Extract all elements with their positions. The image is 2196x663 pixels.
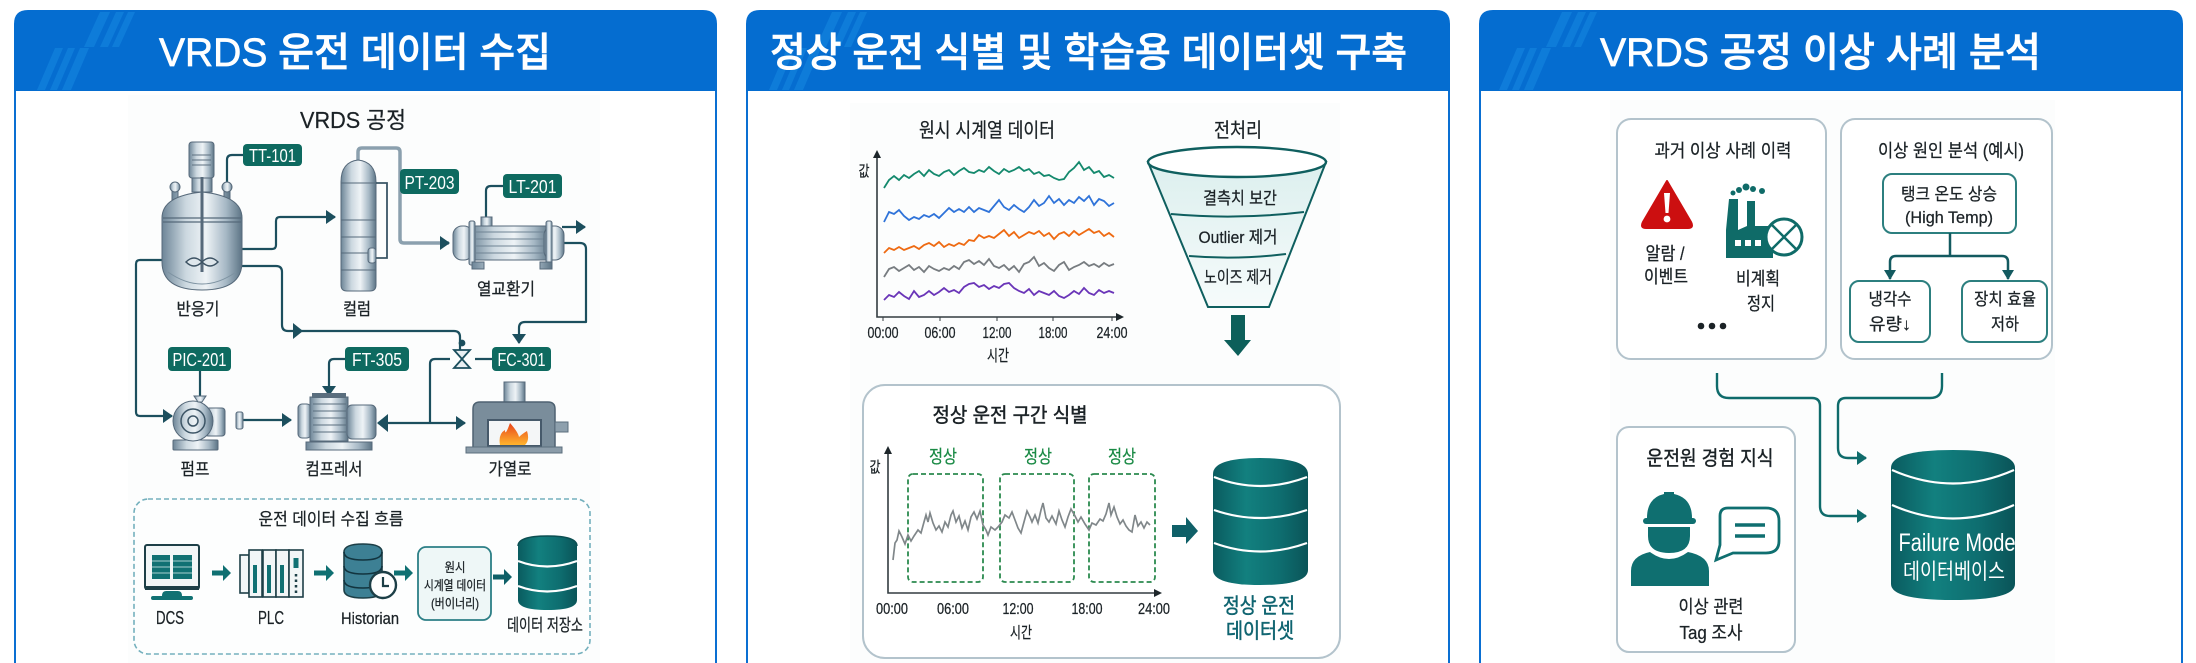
- DCS label: DCS: [156, 608, 184, 628]
- panel: past failure history: [1617, 119, 1826, 359]
- series: blue: [884, 196, 1114, 222]
- reactor: [162, 142, 242, 290]
- box: coolant flow: 유량↓: [1869, 315, 1911, 334]
- heat exchanger: [453, 217, 564, 269]
- panel 1 header: [14, 10, 717, 91]
- tag: PT-203: PT-203: [404, 173, 454, 193]
- panel 2 header: [746, 10, 1450, 91]
- raw time series box: 시계열 데이터: [424, 578, 486, 593]
- icon: worker with hard hat: [1631, 492, 1709, 586]
- normal section title: 정상 운전 구간 식별: [932, 404, 1088, 427]
- connector arrows to database: [1717, 373, 1942, 516]
- raw time series box: 원시: [444, 560, 466, 575]
- panel 3 header: [1479, 10, 2183, 91]
- arrow: [314, 565, 334, 581]
- panel: operator experience: 이상 관련: [1678, 597, 1744, 617]
- chart axis labels: 00:00: [868, 325, 899, 342]
- furnace label: 가열로: [488, 460, 532, 479]
- chart: normal ranges: 12:00: [1002, 601, 1034, 618]
- chart axis labels: 시간: [987, 347, 1009, 365]
- chart: normal ranges: 정상: [929, 447, 957, 467]
- panel 1 title: VRDS 운전 데이터 수집: [159, 31, 551, 75]
- compressor: [298, 393, 376, 450]
- panel 3 image background: [1610, 100, 2055, 663]
- chart: normal ranges: 00:00: [876, 601, 908, 618]
- panel 1 image background: [128, 95, 600, 663]
- icon: DCS monitor: [145, 545, 199, 600]
- icon: normal dataset cylinder: [1213, 458, 1308, 585]
- panel: operator experience: [1617, 427, 1795, 652]
- box: equipment efficiency: 저하: [1991, 315, 2019, 334]
- panel 2 image background: [850, 103, 1340, 663]
- panel: past failure history: 정지: [1747, 294, 1775, 314]
- arrow: [1172, 517, 1198, 544]
- chart: normal ranges: 18:00: [1072, 601, 1103, 618]
- panel: VRDS 공정 이상 사례 분석: [1479, 10, 2183, 663]
- icon: failure mode database: [1891, 450, 2016, 600]
- chart: normal ranges: 시간: [1010, 624, 1032, 642]
- process piping: [136, 148, 586, 432]
- series: green: [884, 162, 1114, 188]
- furnace: [466, 382, 568, 453]
- icon: failure mode database: 데이터베이스: [1903, 559, 2005, 584]
- icon: failure mode database: Failure Mode: [1898, 529, 2016, 557]
- series: purple: [884, 283, 1114, 300]
- icon: warning triangle: [1642, 181, 1692, 228]
- heat exchanger label: 열교환기: [477, 280, 535, 299]
- panel: past failure history: 이벤트: [1644, 267, 1688, 287]
- funnel: preprocessing: Outlier 제거: [1198, 228, 1278, 247]
- compressor label: 컴프레서: [306, 460, 362, 479]
- tag: FT-305: FT-305: [352, 350, 402, 370]
- box: equipment efficiency: [1962, 281, 2047, 342]
- tree arrows: [1884, 233, 2014, 280]
- icon: factory with stop valve: [1726, 184, 1802, 258]
- tag: LT-201: LT-201: [508, 177, 556, 197]
- valve: [454, 340, 470, 368]
- pump label: 펌프: [180, 460, 210, 479]
- chart: normal ranges: 06:00: [937, 601, 969, 618]
- chart: normal ranges: 정상: [1024, 447, 1052, 467]
- tag: FC-301: FC-301: [498, 350, 546, 370]
- normal dataset label: 데이터셋: [1226, 620, 1294, 643]
- icon: data storage cylinder: [518, 536, 577, 610]
- chart axis labels: [868, 325, 1128, 365]
- box: coolant flow: [1850, 281, 1930, 342]
- panel: cause analysis example: 이상 원인 분석 (예시): [1878, 141, 2024, 161]
- panel: past failure history: 알람 /: [1646, 244, 1684, 264]
- raw time series title: 원시 시계열 데이터: [919, 119, 1055, 142]
- chart: normal ranges: 정상: [1108, 447, 1136, 467]
- normal dataset label: [1223, 595, 1295, 643]
- arrow: [212, 565, 231, 581]
- panel 3 title: VRDS 공정 이상 사례 분석: [1600, 31, 2041, 75]
- chart: normal ranges: 24:00: [1138, 601, 1170, 618]
- preprocessing title: 전처리: [1214, 119, 1262, 142]
- PLC label: PLC: [258, 608, 284, 628]
- arrow: [394, 565, 413, 581]
- raw time series box: [418, 547, 491, 620]
- funnel: preprocessing: 결측치 보간: [1203, 189, 1277, 208]
- pump: [173, 396, 243, 450]
- icon: PLC rack: [240, 550, 303, 597]
- panel: operator experience: Tag 조사: [1680, 623, 1743, 643]
- panel: normal operation identification: [863, 385, 1340, 658]
- icon: speech bubble: [1716, 508, 1779, 560]
- tag: PIC-201: PIC-201: [172, 350, 226, 370]
- box: tank temperature rise: [1883, 174, 2016, 233]
- panel: past failure history: 비계획: [1736, 269, 1780, 289]
- data collection flow box: [134, 499, 590, 654]
- icon: Historian database with clock: [344, 544, 396, 598]
- arrow: down: [1224, 315, 1251, 356]
- chart: normal ranges: 값: [870, 459, 881, 476]
- box: equipment efficiency: 장치 효율: [1974, 290, 2036, 309]
- funnel: preprocessing: 노이즈 제거: [1204, 268, 1272, 287]
- process diagram title: VRDS 공정: [300, 107, 406, 133]
- panel: VRDS 운전 데이터 수집: [14, 10, 717, 663]
- panel 2 title: 정상 운전 식별 및 학습용 데이터셋 구축: [770, 31, 1407, 75]
- series: process value: [893, 503, 1150, 560]
- chart: normal ranges: [870, 446, 1170, 642]
- column label: 컬럼: [343, 300, 371, 319]
- normal dataset label: 정상 운전: [1223, 595, 1295, 618]
- box: coolant flow: 냉각수: [1868, 290, 1912, 309]
- chart axis labels: 24:00: [1096, 325, 1128, 342]
- series: orange: [884, 229, 1114, 253]
- chart: raw time series: 값: [858, 163, 870, 180]
- chart axis labels: 12:00: [982, 325, 1012, 342]
- box: tank temperature rise: (High Temp): [1905, 208, 1993, 227]
- panel: cause analysis example: [1841, 119, 2052, 359]
- panel: operator experience: 운전원 경험 지식: [1646, 447, 1774, 470]
- chart axis labels: 06:00: [924, 325, 956, 342]
- tag: FC-301: [492, 347, 551, 371]
- arrow: [493, 569, 512, 585]
- series: gray: [884, 257, 1114, 277]
- tag: TT-101: TT-101: [249, 146, 296, 166]
- column: [341, 160, 387, 291]
- funnel: preprocessing: [1148, 147, 1326, 307]
- flow title: 운전 데이터 수집 흐름: [258, 510, 404, 529]
- data storage label: 데이터 저장소: [507, 616, 583, 635]
- ellipsis dots: [1698, 323, 1726, 329]
- chart axis labels: 18:00: [1038, 325, 1068, 342]
- box: tank temperature rise: 탱크 온도 상승: [1901, 185, 1997, 204]
- raw time series box: (버이너리): [431, 596, 479, 611]
- panel: 정상 운전 식별 및 학습용 데이터셋 구축: [746, 10, 1450, 663]
- reactor label: 반응기: [176, 300, 220, 319]
- Historian label: Historian: [341, 609, 399, 628]
- panel: past failure history: 과거 이상 사례 이력: [1654, 141, 1792, 161]
- chart: raw time series: [858, 150, 1128, 365]
